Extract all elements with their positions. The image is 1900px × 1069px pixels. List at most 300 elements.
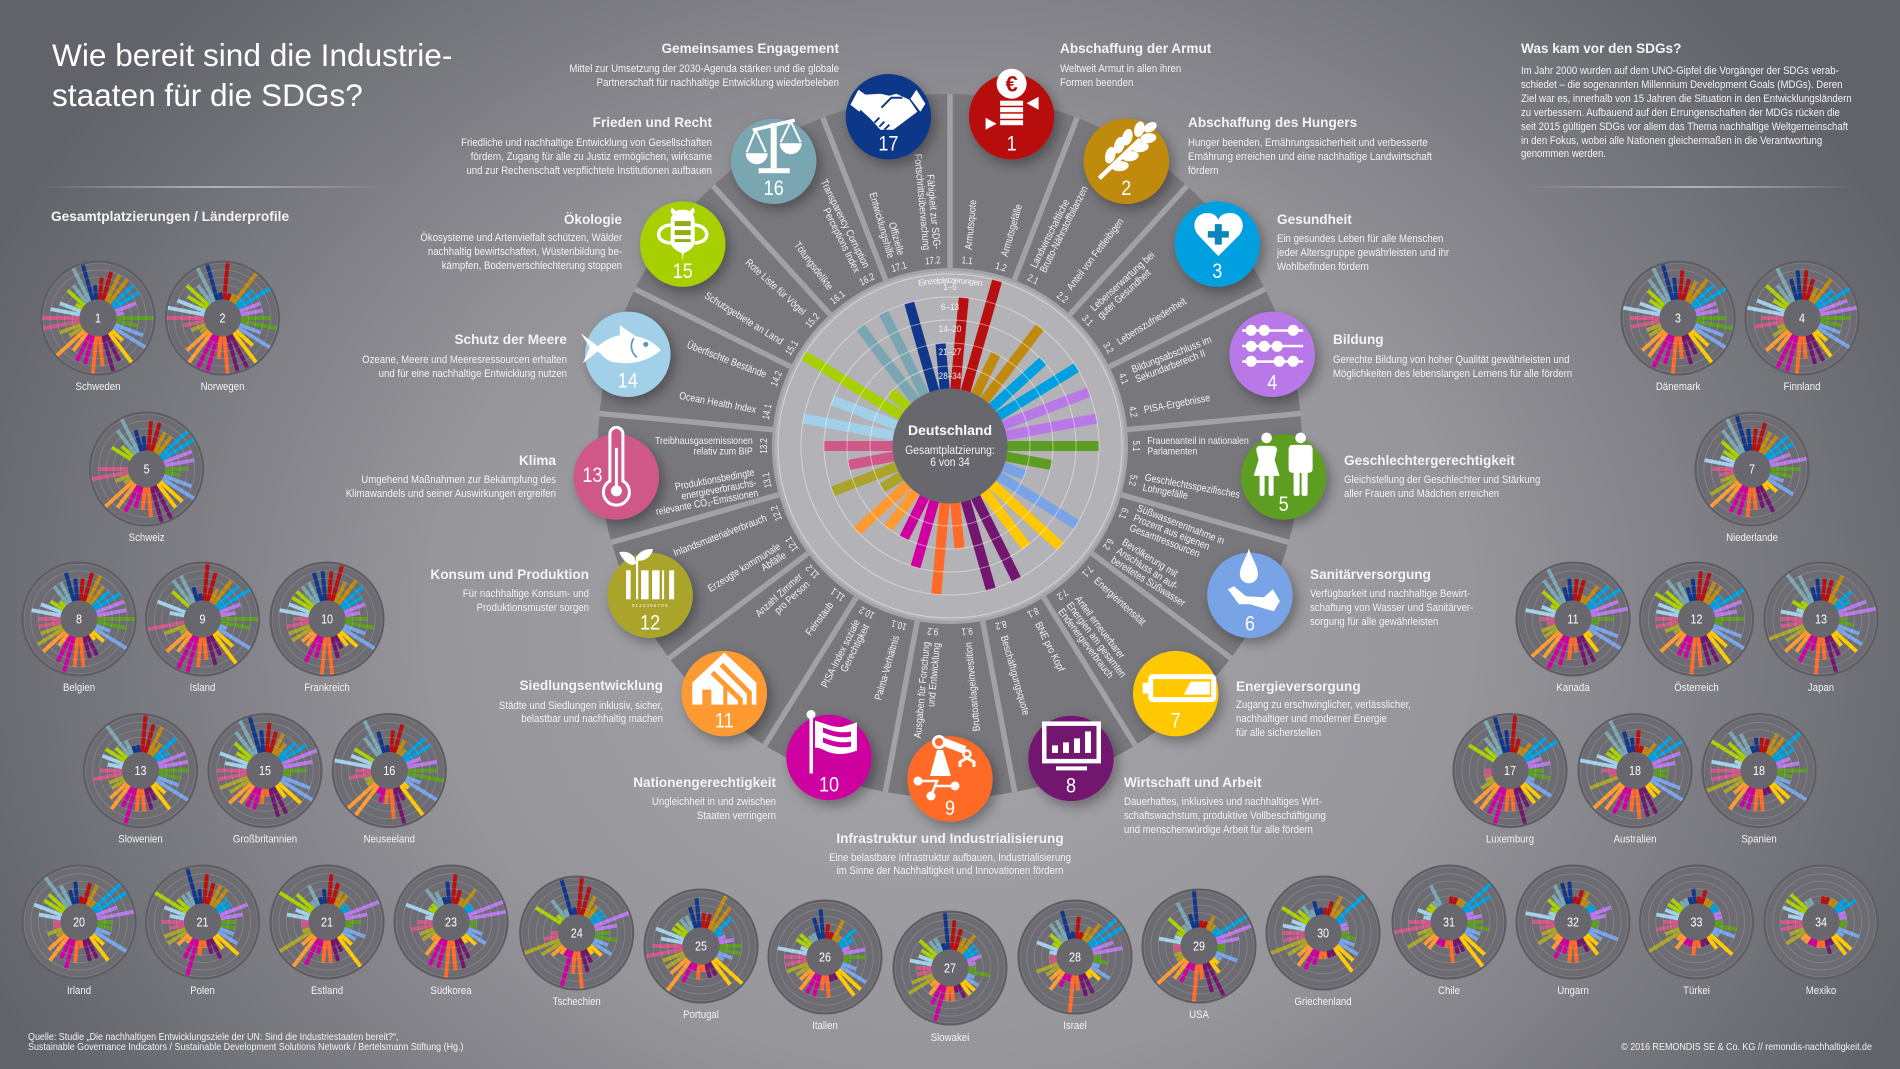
title xyxy=(52,37,452,113)
indicator 16.2 xyxy=(808,178,879,289)
indicator 6.1: Gesamtressourcen xyxy=(1128,522,1201,560)
country: Großbritannien: Großbritannien xyxy=(233,834,297,846)
indicator 16.1: 16.1 xyxy=(828,288,847,306)
country: Israel xyxy=(1017,899,1133,1032)
country: Großbritannien xyxy=(207,713,323,846)
copyright: © 2016 REMONDIS SE & Co. KG // remondis-nachhaltigkeit.de xyxy=(1621,1041,1872,1053)
icon: goal 6 water xyxy=(1207,548,1293,638)
country: Dänemark: Dänemark xyxy=(1656,381,1701,393)
country: Slowakei xyxy=(892,910,1008,1044)
icon: goal 13 climate xyxy=(574,427,659,520)
country: Großbritannien: 15 xyxy=(259,764,271,778)
text: goal 16: Frieden und Recht xyxy=(593,115,712,130)
country: Finnland: Finnland xyxy=(1784,381,1821,393)
text block: what came before the SDGs: Im Jahr 2000 wurden auf dem UNO-Gipfel die Vorgänger der SDGs verab- xyxy=(1521,65,1839,77)
icon: goal 9 infrastructure: 9 xyxy=(945,797,955,820)
indicator 10.1: Palma-Verhältnis xyxy=(873,634,902,702)
text: goal 9: im Sinne der Nachhaltigkeit und Innovationen fördern xyxy=(837,865,1064,877)
indicator 16.2: Perceptions Index xyxy=(820,206,862,275)
indicator 14.1: Ocean Health Index xyxy=(678,390,757,416)
text: goal 8: Wirtschaft und Arbeit xyxy=(1124,775,1262,790)
country: Portugal: 25 xyxy=(695,940,707,954)
text: goal 14: Schutz der Meere xyxy=(454,332,567,347)
icon: goal 4 education xyxy=(1230,312,1315,397)
indicator 6.2: Bevölkerung mit xyxy=(1120,537,1180,580)
country: Mexiko: Mexiko xyxy=(1806,985,1836,997)
country: Norwegen: 2 xyxy=(220,312,225,326)
country: Luxemburg: Luxemburg xyxy=(1486,834,1534,846)
country: Türkei: 33 xyxy=(1691,916,1702,930)
text: goal 14: Ozeane, Meere und Meeresressourcen erhalten xyxy=(362,354,567,366)
icon: goal 17 partnership xyxy=(846,74,931,159)
text: goal 3: jeder Altersgruppe gewährleisten und ihr xyxy=(1276,247,1450,259)
country: Österreich: Österreich xyxy=(1674,681,1719,694)
text: goal 15: Ökosysteme und Artenvielfalt schützen, Wälder xyxy=(420,231,623,244)
indicator 1.1 xyxy=(961,199,980,267)
text: goal 2: Hunger beenden, Ernährungssicherheit und verbesserte xyxy=(1188,137,1428,149)
text: goal 6: schaftung von Wasser und Sanitärver- xyxy=(1310,602,1474,614)
text: goal 6: sorgung für alle gewährleisten xyxy=(1310,616,1439,628)
indicator 8.1: 8.1 xyxy=(1026,605,1041,620)
indicator 10.2: 10.2 xyxy=(857,604,876,621)
icon: goal 16 peace xyxy=(731,118,816,204)
indicator 13.1: energieverbrauchs- xyxy=(680,477,757,503)
indicator 10.2: Gerechtigkeit xyxy=(839,622,873,674)
country: Kanada: Kanada xyxy=(1556,682,1590,694)
text: goal 4: Gerechte Bildung von hoher Qualität gewährleisten und xyxy=(1333,354,1570,366)
icon: goal 11 settlements: 11 xyxy=(715,709,734,733)
text: goal 5: Geschlechtergerechtigkeit xyxy=(1344,453,1515,468)
country: Schweiz: 5 xyxy=(144,463,150,477)
indicator 15.1: Schutzgebiete an Land xyxy=(702,290,785,348)
text block: what came before the SDGs: in den Fokus, wobei alle Nationen gleichermaßen in die Verantwortung xyxy=(1521,135,1822,147)
text: goal 14 xyxy=(362,332,567,380)
icon: goal 3 health: 3 xyxy=(1212,260,1222,283)
icon: goal 8 economy xyxy=(1028,716,1114,801)
country: Italien: 26 xyxy=(819,951,831,965)
country: Italien xyxy=(767,899,883,1032)
country: Österreich xyxy=(1639,561,1754,694)
country: Slowenien: Slowenien xyxy=(118,834,163,846)
indicator 10.1 xyxy=(870,618,908,702)
text: goal 11: Städte und Siedlungen inklusiv, sicher, xyxy=(499,700,663,712)
country: Tschechien: Tschechien xyxy=(553,996,601,1008)
text: goal 5: aller Frauen und Mädchen erreichen xyxy=(1344,488,1499,500)
indicator 12.1 xyxy=(706,532,803,604)
country: Ungarn: 32 xyxy=(1567,916,1579,930)
country: Finnland xyxy=(1744,260,1860,393)
indicator 8.2: 8.2 xyxy=(994,618,1008,632)
central chart: Deutschland: 6 von 34 xyxy=(930,456,970,469)
indicator 14.2: 14.2 xyxy=(768,369,784,388)
indicator labels xyxy=(651,152,1249,740)
indicator 13.1: relevante CO₂-Emissionen xyxy=(655,488,759,518)
indicator 1.1: 1.1 xyxy=(961,254,973,266)
country: Chile: Chile xyxy=(1438,985,1460,997)
indicator 11.1 xyxy=(802,586,847,639)
country: Ungarn xyxy=(1515,864,1631,997)
text: goal 11: Siedlungsentwicklung xyxy=(519,678,663,693)
scale labels: 6–13 xyxy=(941,301,959,312)
icon: goal 6 water: 6 xyxy=(1245,612,1255,636)
icon: goal 1 poverty: € xyxy=(1005,72,1018,97)
scale labels: 1–5 xyxy=(943,281,957,292)
text: goal 11: belastbar und nachhaltig machen xyxy=(521,713,663,725)
text: goal 4: Möglichkeiten des lebenslangen Lernens für alle fördern xyxy=(1333,368,1572,380)
indicator 4.1 xyxy=(1115,334,1217,392)
text: goal 13 xyxy=(346,453,556,500)
indicator 14.2: Überfischte Bestände xyxy=(685,339,768,381)
country: Neuseeland xyxy=(332,713,447,846)
indicator 9.2 xyxy=(912,625,945,740)
text: goal 1: Weltweit Armut in allen ihren xyxy=(1060,63,1181,75)
country: Schweiz: Schweiz xyxy=(129,532,165,544)
country: Türkei xyxy=(1639,864,1754,997)
indicator 7.2: Energien am gesamten xyxy=(1064,600,1128,680)
indicator 4.2: PISA-Ergebnisse xyxy=(1143,392,1211,416)
source note: Quelle: Studie „Die nachhaltigen Entwicklungsziele der UN: Sind die Industriestaaten bereit?“, xyxy=(28,1031,398,1043)
text: goal 17: Gemeinsames Engagement xyxy=(661,41,839,56)
country: Spanien: Spanien xyxy=(1741,834,1777,846)
country: Neuseeland: Neuseeland xyxy=(364,834,415,846)
country: Niederlande: Niederlande xyxy=(1726,532,1778,544)
indicator 2.1: Brutto-Nährstoffbilanzen xyxy=(1038,184,1091,275)
country: Polen: 21 xyxy=(197,916,208,930)
icon: goal 17 partnership: 17 xyxy=(878,132,898,156)
indicator 15.2 xyxy=(742,255,822,330)
country: Schweden: 1 xyxy=(95,312,101,326)
text block: what came before the SDGs: seit 2015 gültigen SDGs vor allem das Thema nachhaltige Weltgemeinschaft xyxy=(1521,121,1848,133)
central chart: Deutschland: Deutschland xyxy=(908,422,992,438)
text: goal 1 xyxy=(1060,41,1212,89)
text: goal 12: Konsum und Produktion xyxy=(430,567,589,582)
indicator 15.1 xyxy=(702,288,800,357)
country: Schweden xyxy=(40,260,156,393)
text: goal 8: schaftswachstum, produktive Vollbeschäftigung xyxy=(1124,810,1326,822)
country: Chile: 31 xyxy=(1443,916,1455,930)
indicator 5.1: Parlamenten xyxy=(1147,446,1197,458)
icon: goal 5 gender xyxy=(1241,433,1326,520)
text: goal 16: und zur Rechenschaft verpflichtete Institutionen aufbauen xyxy=(466,165,712,177)
country: Dänemark: 3 xyxy=(1675,312,1681,326)
indicator 2.2: Anteil von Fettleibigen xyxy=(1065,216,1127,293)
icon: goal 12 consumption xyxy=(607,549,693,638)
indicator 3.1 xyxy=(1076,250,1164,333)
country: Spanien: 18 xyxy=(1753,764,1765,778)
icon: goal 7 energy: 7 xyxy=(1171,709,1181,733)
icon: goal 12 consumption: 12 xyxy=(640,611,660,635)
text: goal 12 xyxy=(430,567,589,614)
country: Estland: 21 xyxy=(321,916,333,930)
text: goal 15 xyxy=(420,212,623,272)
icon: goal 10 inequality xyxy=(786,710,872,800)
scale labels: 21–27 xyxy=(939,346,961,357)
icon: goal 15 ecosystems xyxy=(640,201,725,287)
text block: what came before the SDGs: Ziel war es, innerhalb von 15 Jahren die Situation in den Entwicklungsländern xyxy=(1521,93,1852,105)
indicator 12.1: Erzeugte kommunale xyxy=(706,541,783,595)
indicator 17.1: 17.1 xyxy=(890,259,908,274)
indicator 17.1 xyxy=(866,188,911,275)
country: Polen: Polen xyxy=(190,985,215,997)
text: goal 12: Für nachhaltige Konsum- und xyxy=(463,588,589,600)
indicator 16.1: Tötungsdelikte xyxy=(791,240,835,293)
indicator 17.2 xyxy=(911,152,944,267)
text: goal 7: Energieversorgung xyxy=(1236,679,1361,694)
country: Israel: 28 xyxy=(1069,951,1081,965)
country: Israel: Israel xyxy=(1063,1020,1087,1032)
text: goal 10 xyxy=(633,775,776,822)
indicator 7.1 xyxy=(1079,564,1148,628)
country: Türkei: Türkei xyxy=(1683,985,1710,997)
indicator 2.2: 2.2 xyxy=(1055,290,1070,305)
country: Portugal xyxy=(643,888,759,1021)
text: goal 1: Formen beenden xyxy=(1060,77,1133,89)
text: goal 7: für alle sicherstellen xyxy=(1236,727,1321,739)
indicator 1.2: Armutsgefälle xyxy=(999,203,1025,258)
country: Kanada: 11 xyxy=(1567,613,1579,627)
indicator 13.1: Produktionsbedingte xyxy=(674,467,755,493)
country: Luxemburg: 17 xyxy=(1504,764,1516,778)
country: Slowakei: Slowakei xyxy=(931,1032,969,1044)
indicator 16.2: Transparency Corruption xyxy=(817,178,872,270)
indicator 6.2: Anschluss an auf- xyxy=(1114,546,1180,593)
text: goal 13: Klimawandels und seiner Auswirkungen ergreifen xyxy=(346,488,556,500)
indicator 7.1: Energieintensität xyxy=(1091,575,1148,628)
text block: what came before the SDGs: zu verbessern. Aufbauend auf den Errungenschaften der MDGs rücken die xyxy=(1521,107,1840,119)
country: Portugal: Portugal xyxy=(683,1009,719,1021)
country: Tschechien: 24 xyxy=(571,927,583,941)
country: Irland xyxy=(21,864,137,997)
indicator 6.1: Süßwasserentnahme in xyxy=(1135,503,1226,547)
text: goal 6 xyxy=(1310,567,1474,628)
country: Mexiko xyxy=(1763,864,1879,997)
country: Australien: Australien xyxy=(1614,834,1657,846)
icon: goal 12 consumption: 0123456789 xyxy=(632,603,668,609)
heading: country profiles: Gesamtplatzierungen / Länderprofile xyxy=(51,209,289,224)
indicator 8.1 xyxy=(1025,605,1067,674)
text: goal 8: und menschenwürdige Arbeit für alle fördern xyxy=(1124,824,1313,836)
country: Japan: 13 xyxy=(1815,613,1827,627)
country: Italien: Italien xyxy=(812,1020,838,1032)
indicator 13.2 xyxy=(655,435,769,458)
indicator 11.2 xyxy=(753,560,824,628)
indicator 11.2: pro Person xyxy=(772,579,812,617)
icon: goal 16 peace: 16 xyxy=(764,177,784,201)
indicator 3.1: guter Gesundheit xyxy=(1096,267,1154,322)
central chart: Deutschland: Gesamtplatzierung: xyxy=(905,444,995,457)
icon: goal 5 gender: 5 xyxy=(1279,493,1289,516)
icon: goal 13 climate: 13 xyxy=(582,464,603,487)
indicator 12.2: 12.2 xyxy=(768,504,784,523)
indicator 17.2: Fortschrittsüberwachung xyxy=(911,153,932,251)
text: goal 10: Ungleichheit in und zwischen xyxy=(652,796,776,808)
indicator 15.2: Rote Liste für Vögel xyxy=(743,257,808,318)
indicator 13.1: 13.1 xyxy=(760,472,774,489)
text: goal 13: Klima xyxy=(519,453,556,468)
indicator 9.1: Bruttoanlageinvestition xyxy=(963,642,983,732)
indicator 15.1: 15.1 xyxy=(783,338,800,357)
icon: goal 11 settlements xyxy=(682,651,767,736)
indicator 4.1: Bildungsabschluss im xyxy=(1130,334,1213,376)
indicator 11.2: 11.2 xyxy=(803,562,822,581)
country: Chile xyxy=(1391,864,1507,997)
indicator 11.2: Anzahl Zimmer xyxy=(753,571,806,620)
indicator 13.2: 13.2 xyxy=(758,438,769,454)
icon: goal 2 hunger xyxy=(1084,118,1169,204)
text: goal 16: Friedliche und nachhaltige Entwicklung von Gesellschaften xyxy=(461,137,712,149)
country: Südkorea xyxy=(393,864,509,997)
indicator 7.2 xyxy=(1045,581,1136,687)
country: Ungarn: Ungarn xyxy=(1557,985,1589,997)
text block: what came before the SDGs: genommen werden. xyxy=(1521,148,1606,160)
wheel: sector ring xyxy=(598,94,1302,798)
text block: what came before the SDGs: Was kam vor den SDGs? xyxy=(1521,41,1681,56)
country: Luxemburg xyxy=(1452,713,1568,846)
country: Polen xyxy=(145,864,260,997)
text: goal 3 xyxy=(1276,212,1450,273)
text: goal 12: Produktionsmuster sorgen xyxy=(477,602,589,614)
indicator 7.1: 7.1 xyxy=(1080,564,1095,579)
country: Australien: 18 xyxy=(1629,764,1641,778)
text: goal 9: Infrastruktur und Industrialisierung xyxy=(836,831,1064,846)
indicator 17.2: 17.2 xyxy=(925,254,941,267)
indicator 5.2: Lohngefälle xyxy=(1142,482,1189,502)
country: Dänemark xyxy=(1620,260,1736,393)
indicator 3.2: 3.2 xyxy=(1101,340,1116,355)
indicator 12.2: Inlandsmaterialverbrauch xyxy=(672,513,769,559)
icon: goal 2 hunger: 2 xyxy=(1121,177,1131,201)
icon: goal 14 oceans: 14 xyxy=(618,369,638,393)
indicator 8.1: BNE pro Kopf xyxy=(1032,620,1067,674)
country: Norwegen xyxy=(165,260,280,393)
country: Finnland: 4 xyxy=(1799,312,1806,326)
country: Frankreich: 10 xyxy=(321,613,333,627)
indicator 5.2: 5.2 xyxy=(1127,474,1140,487)
text: goal 2: Abschaffung des Hungers xyxy=(1188,115,1357,130)
country: Südkorea: 23 xyxy=(445,916,457,930)
indicator 7.2: Anteil erneuerbarer xyxy=(1072,594,1127,662)
indicator 5.2 xyxy=(1126,469,1241,512)
scale labels xyxy=(918,276,982,381)
indicator 16.2: 16.2 xyxy=(857,271,876,288)
text: goal 16: fördern, Zugang für alle zu Justiz ermöglichen, wirksame xyxy=(471,151,712,163)
indicator 9.2: 9.2 xyxy=(927,626,939,638)
scale labels: 14–20 xyxy=(939,323,961,334)
country: Belgien xyxy=(21,561,137,694)
indicator 7.2: Endenergieverbrauch xyxy=(1055,607,1116,681)
icon: goal 9 infrastructure xyxy=(907,736,993,822)
text: goal 9 xyxy=(829,831,1071,877)
indicator 2.1: Landwirtschaftliche xyxy=(1028,198,1073,270)
indicator 3.1: Lebenserwartung bei xyxy=(1088,250,1157,314)
country: Kanada xyxy=(1515,561,1631,694)
text: goal 9: Eine belastbare Infrastruktur aufbauen, Industrialisierung xyxy=(829,852,1071,864)
indicator 8.2: Beschäftigungsquote xyxy=(998,634,1032,717)
indicator 10.1: 10.1 xyxy=(890,618,908,633)
title: Wie bereit sind die Industrie- xyxy=(52,37,452,73)
title: staaten für die SDGs? xyxy=(52,77,363,113)
indicator 17.1: Offizielle xyxy=(886,221,906,257)
indicator 5.2: Geschlechtsspezifisches xyxy=(1144,472,1241,501)
text: goal 15: nachhaltig bewirtschaften, Wüstenbildung be- xyxy=(428,246,623,258)
text: goal 15: Ökologie xyxy=(564,212,622,227)
indicator 5.1 xyxy=(1131,435,1249,458)
indicator 9.2: und Entwicklung xyxy=(926,642,943,707)
source note xyxy=(28,1031,463,1053)
country: USA: USA xyxy=(1189,1009,1209,1021)
country: Griechenland: Griechenland xyxy=(1294,996,1352,1008)
indicator 4.1: 4.1 xyxy=(1117,371,1131,386)
text: goal 6: Sanitärversorgung xyxy=(1310,567,1431,582)
indicator 4.2: 4.2 xyxy=(1127,405,1140,418)
country: Slowenien: 13 xyxy=(135,764,146,778)
icon: goal 7 energy xyxy=(1133,651,1218,736)
indicator 16.1 xyxy=(790,238,847,306)
country: Estland: Estland xyxy=(311,985,343,997)
country: Mexiko: 34 xyxy=(1815,916,1827,930)
indicator 11.1: 11.1 xyxy=(828,586,847,604)
text: goal 17: Partnerschaft für nachhaltige Entwicklung wiederbeleben xyxy=(597,77,839,89)
country: Niederlande xyxy=(1694,411,1810,544)
country: Japan xyxy=(1763,561,1879,694)
indicator 13.1 xyxy=(651,464,775,518)
indicator 1.2: 1.2 xyxy=(994,260,1008,274)
text: goal 15: kämpfen, Bodenverschlechterung stoppen xyxy=(442,260,622,272)
text: goal 7: nachhaltiger und moderner Energie xyxy=(1236,713,1387,725)
scale labels: Einzelplatzierungen xyxy=(918,276,982,286)
text: goal 10: Nationengerechtigkeit xyxy=(633,775,776,790)
indicator 17.2: Fähigkeit zur SDG- xyxy=(924,174,942,250)
country: USA: 29 xyxy=(1193,940,1205,954)
country: Spanien xyxy=(1701,713,1817,846)
country: Neuseeland: 16 xyxy=(383,764,395,778)
indicator 10.2: PISA-Index soziale xyxy=(819,618,863,690)
indicator 1.2 xyxy=(994,203,1025,274)
indicator 15.2: 15.2 xyxy=(803,311,822,330)
source note: Sustainable Governance Indicators / Sustainable Development Solutions Network / Bertelsmann Stiftung (Hg.) xyxy=(28,1041,463,1053)
country: USA xyxy=(1141,888,1257,1021)
country: Frankreich: Frankreich xyxy=(304,682,350,694)
country: Irland: 20 xyxy=(73,916,85,930)
text: goal 8 xyxy=(1124,775,1326,836)
country: Norwegen: Norwegen xyxy=(201,381,245,393)
indicator 5.1: 5.1 xyxy=(1131,440,1142,452)
text: goal 5 xyxy=(1344,453,1541,500)
icon: goal 1 poverty: 1 xyxy=(1007,132,1017,156)
country: Irland: Irland xyxy=(67,985,91,997)
country: Tschechien xyxy=(519,875,634,1008)
country: Südkorea: Südkorea xyxy=(430,985,472,997)
text: goal 2 xyxy=(1188,115,1432,177)
text: goal 3: Wohlbefinden fördern xyxy=(1277,261,1369,273)
indicator 13.2: Treibhausgasemissionen xyxy=(655,435,753,447)
indicator 7.2: 7.2 xyxy=(1055,587,1070,602)
country: Japan: Japan xyxy=(1808,682,1834,694)
text: goal 2: Ernährung erreichen und eine nachhaltige Landwirtschaft xyxy=(1188,151,1432,163)
indicator 6.1 xyxy=(1112,497,1226,567)
indicator 5.1: Frauenanteil in nationalen xyxy=(1147,435,1249,447)
text: goal 6: Verfügbarkeit und nachhaltige Bewirt- xyxy=(1310,588,1470,600)
text: goal 8: Dauerhaftes, inklusives und nachhaltiges Wirt- xyxy=(1124,796,1322,808)
text: goal 2: fördern xyxy=(1188,165,1219,177)
indicator 3.1: 3.1 xyxy=(1080,313,1095,328)
text: goal 5: Gleichstellung der Geschlechter und Stärkung xyxy=(1344,474,1541,486)
country: Niederlande: 7 xyxy=(1749,463,1755,477)
text: goal 3: Gesundheit xyxy=(1277,212,1352,227)
country: Belgien: Belgien xyxy=(63,682,95,694)
indicator 10.2 xyxy=(819,603,880,694)
text: goal 10: Staaten verringern xyxy=(697,810,776,822)
